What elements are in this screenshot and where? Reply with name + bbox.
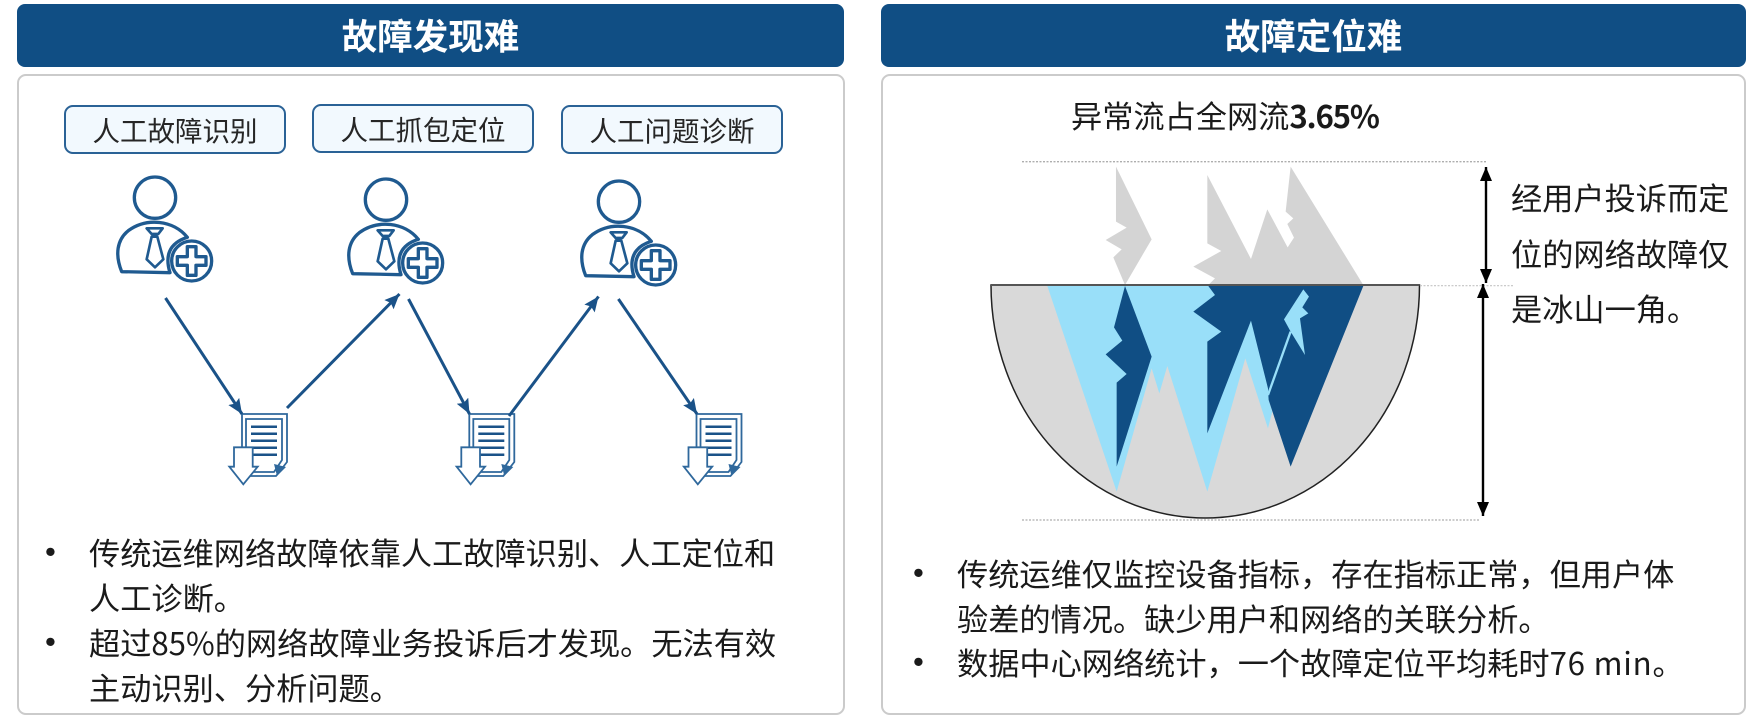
waterline	[991, 284, 1420, 286]
text: tip of the iceberg note	[1511, 174, 1729, 330]
heading: fault discovery is hard	[17, 4, 844, 67]
heading: fault location is hard: 故障定位难	[1225, 9, 1402, 60]
text: tip of the iceberg note: 是冰山一角。	[1511, 285, 1698, 330]
heading: fault discovery is hard: 故障发现难	[342, 9, 519, 60]
text: tip of the iceberg note: 位的网络故障仅	[1511, 230, 1729, 275]
text: left bullet points: 主动识别、分析问题。	[89, 664, 401, 709]
icon: person 3	[582, 181, 676, 285]
text: right bullet points: 传统运维仅监控设备指标，存在指标正常，但用户体	[957, 550, 1674, 595]
text: right bullet points: 验差的情况。缺少用户和网络的关联分析。	[957, 595, 1550, 640]
text: right bullet points: •	[913, 644, 924, 679]
label: manual packet capture: 人工抓包定位	[340, 108, 506, 148]
text: tip of the iceberg note: 经用户投诉而定	[1511, 174, 1729, 219]
chart: iceberg diagram	[991, 167, 1420, 518]
icon: document 1	[229, 414, 287, 484]
arrow: document 2 to person 3	[509, 296, 598, 416]
panel: left background	[17, 74, 845, 715]
text: left bullet points: 超过85%的网络故障业务投诉后才发现。无法有效	[89, 619, 776, 664]
icon: document 2	[457, 414, 514, 484]
text: right bullet points: •	[913, 555, 924, 590]
arrow: document 1 to person 2	[287, 294, 400, 408]
icon: document 3	[684, 414, 742, 484]
guide line: waterline extension	[1420, 285, 1513, 287]
arrow: person 1 to document 1	[166, 298, 242, 414]
label: manual packet capture	[312, 104, 534, 153]
iceberg below water	[1047, 286, 1363, 492]
text: left bullet points: •	[45, 624, 56, 659]
panel: right background	[881, 74, 1746, 715]
arrow: person 2 to document 2	[408, 299, 470, 414]
water bowl	[991, 285, 1420, 518]
icon: person 1	[118, 177, 212, 281]
label: manual diagnosis	[561, 105, 783, 154]
arrow: person 3 to document 3	[618, 299, 697, 414]
iceberg above water	[1106, 167, 1363, 285]
text: left bullet points: 人工诊断。	[89, 574, 245, 619]
arrow: hidden portion height	[1482, 284, 1484, 516]
text: left bullet points: 传统运维网络故障依靠人工故障识别、人工定位和	[89, 529, 775, 574]
arrow: visible portion height	[1485, 167, 1487, 283]
text: right bullet points: 数据中心网络统计，一个故障定位平均耗时76 min。	[957, 639, 1684, 684]
label: manual diagnosis: 人工问题诊断	[590, 109, 754, 149]
heading: fault location is hard	[881, 4, 1746, 67]
text: left bullet points	[45, 529, 776, 709]
guide line: iceberg top	[1022, 161, 1488, 163]
text: right bullet points	[913, 550, 1684, 684]
text: left bullet points: •	[45, 534, 56, 569]
text: abnormal flow share: 异常流占全网流3.65%	[1071, 92, 1379, 137]
label: manual fault identification: 人工故障识别	[92, 109, 258, 149]
label: manual fault identification	[64, 105, 286, 154]
guide line: iceberg bottom	[1022, 519, 1479, 521]
icon: person 2	[349, 179, 443, 283]
